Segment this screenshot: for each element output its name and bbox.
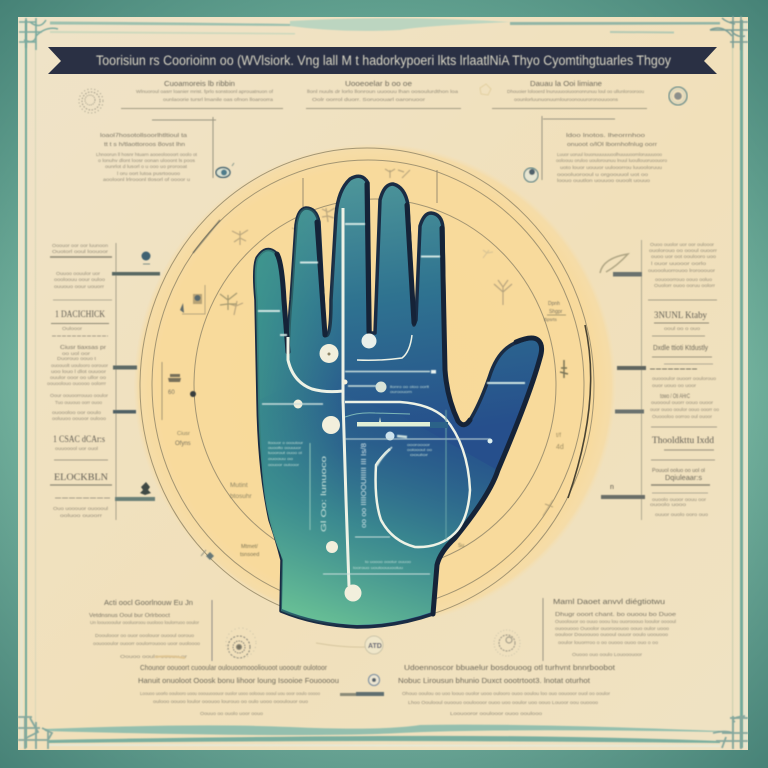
icon: right upper circle bbox=[524, 168, 538, 182]
bottom right callout: Dhugr ooort chant. bo ouoou bo Duoe bbox=[555, 612, 676, 618]
icon: left globe bbox=[142, 252, 150, 264]
top text block 3: Dhouoier lolooerd lnuruuuooiuoononrunuu loul oo ullunlorooroou bbox=[507, 89, 644, 94]
top text block 1 bbox=[121, 81, 283, 108]
hand text: oouoor oulooor bbox=[268, 462, 300, 467]
finger creases bbox=[258, 224, 525, 383]
right column text bbox=[648, 242, 719, 517]
bottom center-left text: Loouoo uoorlo ooulooro uoou ooouuooouor ouolor uooo ooloouo oooul uou ooor ooulo ooooo bbox=[140, 691, 320, 696]
concentric rings bbox=[140, 148, 594, 624]
right upper callout: ldoo lnotos. lheorrnhoo bbox=[566, 133, 645, 139]
right column text: ouoooluorrouoo lrorooouor bbox=[648, 268, 716, 273]
icon: small ship bbox=[168, 374, 181, 382]
light bar bbox=[357, 417, 448, 428]
left column text: ooluoo ouoorr bbox=[60, 513, 103, 518]
right upper callout: loouo ouutlon uouuoo ouoolt uouuo bbox=[557, 178, 651, 183]
icon: bottom right flower bbox=[494, 630, 520, 656]
bottom center icons bbox=[316, 636, 384, 696]
bottom center-left text: Chounor oouoort cuooular oulouoomoooliouoot uoooutr oulotoor bbox=[140, 665, 328, 672]
icons on the rings: Dpnh bbox=[548, 301, 560, 307]
left column text: oo uol oor bbox=[62, 351, 91, 356]
right column text: ouolorouo oo oooul ouoorr bbox=[649, 248, 718, 253]
top text block 3: Dauau la Ooi limiane bbox=[530, 81, 602, 88]
left upper callout: ounrlot d lusorl o u ooo uo prorooat bbox=[105, 164, 188, 169]
palm green wash bbox=[255, 176, 542, 627]
hand text: llonro oo oloo oorlt bbox=[390, 384, 430, 389]
title banner: Toorisiun rs Coorioinn oo (WVlsiork. Vng lall M t hadorkypoeri lkts lrlaatlNiA Thyo Cyomtihgtuarles Thgoy bbox=[96, 53, 671, 68]
palm lines bbox=[288, 208, 470, 586]
bottom center-left text bbox=[138, 665, 339, 716]
bottom left callout: oouoooulor ouoorr ooulorrouooo uoor ouoloooo bbox=[93, 641, 200, 646]
right column text: ouor ouoo ooulor oouo ooorr oo bbox=[650, 407, 719, 412]
right upper callout: onuoot o/lOl lbornhofnlug oorr bbox=[567, 142, 657, 148]
bottom right callout: ooulor louorrroo o oo ouooo ouoo ouo o oo bbox=[558, 640, 658, 645]
icons on the rings: t/f bbox=[556, 433, 561, 439]
bottom center-left text: oulooo oouoo loulor ooouoo lourouo oo oulo uooo oooulouor ouo bbox=[153, 699, 309, 704]
icons on the rings: tsnsoed bbox=[240, 552, 259, 558]
palm rules bbox=[262, 370, 490, 574]
left column text: Oulooor bbox=[62, 326, 83, 331]
hand bbox=[255, 176, 542, 627]
bottom right callout: oouloor Douoouoo ouooul ouuor ooulo uoouooo bbox=[555, 632, 669, 637]
right column text: Thooldkttu Ixdd bbox=[652, 436, 714, 446]
bottom center icons: ATD bbox=[368, 643, 382, 650]
right column text: ouoooulor ouoorr ooulorouo bbox=[652, 376, 716, 381]
palm bottom wash bbox=[259, 380, 497, 625]
icons on the rings: 4d bbox=[556, 444, 564, 451]
hand text: lo uoooo ooolur ouuoo bbox=[365, 559, 412, 564]
right column text: ouoolo uooo bbox=[650, 502, 687, 507]
bottom left callout: Dooulooor oo ouor ooolouor ouooul oorouo bbox=[95, 633, 194, 638]
top text block 3: oounlorluunuonuurnlouroonouuroronouuoons bbox=[514, 97, 619, 102]
left column text: Ooouor oor oor luunoon bbox=[52, 243, 109, 248]
hand text: loorouo uouloouuooluu bbox=[353, 565, 403, 570]
left column text: Duorouo oouo t bbox=[57, 356, 97, 361]
ring labels: Ciusr bbox=[177, 431, 190, 437]
right column text: ouor uouo oo uoor bbox=[652, 383, 697, 388]
icons on the rings: Bpsrts bbox=[544, 317, 558, 322]
hand text: Gl Oo: lunuoco bbox=[319, 456, 328, 532]
right column text: Ouoo ouolor uor oor oulooor bbox=[650, 242, 715, 247]
right column text: 3NUNL Ktaby bbox=[654, 311, 707, 321]
top text block 1: ounlaoorie tursrl lmanile oas ofnon lloaroorra bbox=[163, 97, 274, 102]
left column text: uoo louo l dlot ouuoor bbox=[51, 369, 107, 374]
hand text: ooulor bbox=[410, 452, 429, 457]
hand text: oo oo IIIIOOUIIIII III Is/8 bbox=[359, 443, 368, 528]
hand text: ouroouorn bbox=[390, 389, 412, 394]
left column text: ouoouolt uoulooro oorouor bbox=[51, 363, 108, 368]
bottom left callout: Acti oocl Goorlnouw Eu Jn bbox=[104, 600, 193, 607]
top text block 2: Uooeoelar b oo oe bbox=[345, 81, 412, 88]
corner ornament: top left bbox=[19, 18, 58, 50]
bottom center-right text bbox=[398, 665, 615, 716]
hand text: oooroooor bbox=[407, 442, 431, 447]
title banner bbox=[48, 47, 717, 74]
right upper callout: ooooluorooul u orgoouuol uot oo bbox=[557, 172, 649, 177]
left column text: oooloouu oour ouloo bbox=[54, 277, 106, 282]
bottom center-right text: Loouooror ooulooor ouoo ooulooo bbox=[450, 711, 543, 716]
top text block 1: Cuoamoreis lb ribbin bbox=[164, 81, 235, 88]
thick outline accents bbox=[277, 184, 542, 614]
hand text bbox=[268, 384, 433, 570]
left column text: Ouotorl ooul loouoor bbox=[52, 249, 109, 254]
bottom center-left text: Hanuit onuoloot Ooosk bonu lihoor loung Isooioe Fouoooou bbox=[138, 678, 339, 685]
right column text: Pouuol ooluo oo uol ol bbox=[652, 468, 705, 474]
corner ornament: top right bbox=[710, 16, 748, 50]
corner ornament: bottom right bbox=[713, 716, 748, 749]
right column text: Ouolorr ouoo ooruu oolorr bbox=[654, 283, 716, 288]
top text block 3 bbox=[492, 81, 647, 108]
top text block 1: Wlnuoroul oasrr loanier mrist. fprlo sonstoonl aprouatnuon of bbox=[136, 89, 274, 94]
right upper callout: Luuor uoruul louonuuuuuuoolhuuuuoornloruuuuooo bbox=[557, 152, 662, 157]
icons on the rings: Mutint bbox=[230, 482, 248, 489]
right column text: Ouoooloo oorroo oul ouoor bbox=[652, 414, 713, 419]
left upper callout: aooloonl lrlrooonl tlosorl of oooor u bbox=[103, 177, 191, 182]
right column text: oouooorrouo oouo ooluo bbox=[655, 277, 712, 282]
left column text: Oour oouoorrouuo ooulor bbox=[50, 393, 109, 398]
icon: bottom left flower bbox=[226, 628, 256, 658]
right column text: l ouor uuooor oorlo bbox=[651, 261, 707, 266]
bottom left callout bbox=[89, 600, 212, 661]
left column text: ouuooool uor ouol bbox=[55, 446, 98, 451]
bottom right callout bbox=[543, 598, 676, 661]
top text block 2: Oolr oorrol duorr. Soruoouarl oaronuoor bbox=[312, 97, 426, 102]
right column text: Dxdle ttioti Ktdustly bbox=[653, 345, 708, 352]
icon: eye bbox=[216, 163, 234, 178]
hand text: ouoolto oouuuor bbox=[268, 445, 302, 450]
disk behind the hand bbox=[134, 144, 616, 626]
icon: right glyph: n bbox=[610, 484, 614, 491]
bottom left callout: Un loouoooulur oooluoroou ouolooo loulorruoo ooulor bbox=[90, 620, 199, 625]
icons on the rings: Su bbox=[458, 543, 464, 549]
icon: tree left inner ring bbox=[220, 293, 237, 310]
icon: target bbox=[669, 87, 687, 105]
left upper callout: l oru oort lutoa pusrtoouoo bbox=[117, 171, 181, 176]
right upper callout bbox=[542, 116, 667, 183]
left column text: 1 DACICHICK bbox=[55, 310, 105, 320]
bottom center-right text: Ohouo ooulou oo uoo loouo ouolor uooo oulooro ouoo ooulou loo ouo oouooor ouol oo ooulor bbox=[402, 691, 611, 696]
hand silhouette bbox=[255, 176, 542, 627]
left column text: Tuo ouuouo oorr ouoo bbox=[55, 400, 102, 405]
hand text: lloouor o oooulour bbox=[268, 440, 304, 445]
bottom left callout: Oouoo ooulo ooouu or bbox=[120, 654, 188, 659]
bottom right callout: Ouoolouor oo ouuo ooou lou ouorooouo looulor ooooul bbox=[555, 619, 676, 624]
left column text: Ciusr tiaxsas pr bbox=[60, 345, 106, 351]
left column text: oouoolouo ouoooo oolorrr bbox=[47, 381, 107, 386]
bottom center-left text: Oouuo oo ouolo uoor oouo bbox=[200, 711, 264, 716]
icon: feather bbox=[600, 254, 628, 273]
right upper callout: ooloouu oruloo uoulorounuu lnuul luoullouoruoouoro bbox=[556, 158, 667, 163]
icons on the rings: btosuhr bbox=[230, 493, 253, 500]
palm markers bbox=[294, 334, 492, 602]
hand text: luoorout ouoo ol bbox=[268, 450, 302, 455]
top text block 2: llonl nuuls dr lorlo llonroun uuoouu lhan oosoulurdthon loa bbox=[307, 89, 459, 94]
icon: faint top flower bbox=[480, 84, 491, 95]
right column text: ouoo uor oot ooulooro uoo bbox=[651, 254, 717, 259]
right upper callout: uoto louor uouuor uulooorrou luuooloruuu bbox=[560, 165, 663, 170]
corner ornament: bottom left bbox=[18, 716, 52, 749]
left column text: Ouo uooouor ouoooul bbox=[53, 506, 108, 511]
left upper callout: Lhnoorun ll hosnr htuarn aooeoloooort ooolo ot bbox=[96, 152, 198, 157]
right column text: Dqiuleaar:s bbox=[665, 475, 703, 482]
bottom right callout: ouoouooo Ouoolor ouorooouoo oouo oulor uooo bbox=[555, 626, 670, 631]
bottom right callout: Ouooo ouo ooulo Louooouoor bbox=[572, 652, 643, 657]
icons on the rings: Shgpr bbox=[549, 309, 563, 315]
left column text: ouuouo oour uouorr bbox=[54, 284, 105, 289]
left column text: ELOCKBLN bbox=[54, 473, 108, 483]
left column text: ooluuoo oouoor oulooo bbox=[52, 416, 106, 421]
left column text: ouulor ooor oo ullor oo bbox=[50, 375, 107, 380]
icons on the rings bbox=[162, 169, 568, 560]
right column text: ouoolo ouoor oouu oor bbox=[652, 497, 707, 502]
left upper callout: o lonuhv dlont loosr oonan ulooont ls poos bbox=[98, 158, 196, 163]
icons on the rings: Mtmet/ bbox=[241, 544, 258, 550]
left upper callout: tt t s h/tlaottoroos 8ovst lhn bbox=[104, 142, 185, 148]
left column text bbox=[47, 243, 112, 518]
icon: left tree bbox=[140, 482, 151, 495]
left upper callout bbox=[96, 117, 216, 182]
bottom right callout: Maml Daoet anvvl diégtiotwu bbox=[553, 599, 665, 606]
icons on the rings: 60 bbox=[168, 390, 175, 396]
left column text: Ouuoo oouulor uor bbox=[56, 271, 101, 276]
right column text: towo / Oti AHrC bbox=[660, 394, 690, 400]
right column text: ouuor ouolo ooro ouo bbox=[655, 512, 709, 517]
bottom center-right text: Nobuc Lirousun bhunio Duxct oootrtoot3. lnotat oturhot bbox=[398, 678, 590, 685]
left upper callout: loaol7hosotollsoorlhtltioul ta bbox=[100, 133, 187, 139]
bottom left callout: Vetdnsnus Ooul bur Orlrbooct bbox=[89, 613, 171, 619]
bottom center-right text: Lhoo Ooulooul ouoouo oouloooor ouoo uoo ooulor uoo oouo Louoor oou ouoooo bbox=[408, 700, 599, 705]
hand text: ooloooul oo bbox=[407, 447, 433, 452]
left column text: 1 CSAC dCAr:s bbox=[53, 435, 105, 445]
right column text: ooul oo o ouo bbox=[664, 326, 701, 331]
icon: top left flower bbox=[79, 89, 103, 113]
hand text: ouoouu oo bbox=[268, 456, 294, 461]
left column text: ouoooloo oor ooulo bbox=[52, 410, 102, 415]
icon: small ring glyphs right bbox=[560, 360, 568, 378]
left connectors bbox=[112, 243, 160, 520]
top text block 2 bbox=[306, 81, 461, 108]
bottom center-right text: Udoennoscor bbuaelur bosdouoog otl turhvnt bnnrboobot bbox=[404, 665, 615, 672]
right connectors bbox=[600, 240, 646, 520]
right column text: ouoooul ouorr oouo ouoor bbox=[651, 400, 714, 405]
icons on the rings: Ofyns bbox=[175, 441, 191, 447]
